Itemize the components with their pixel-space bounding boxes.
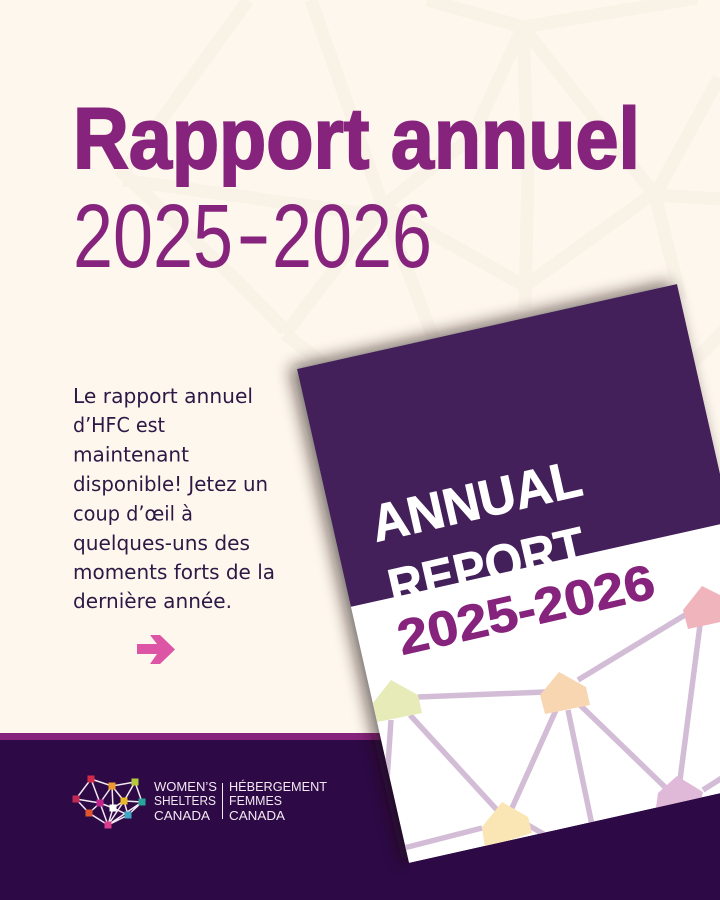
network node: orange: [540, 672, 590, 714]
title line: year: -: [236, 184, 271, 284]
logo wordmark: SHELTERS: [154, 793, 216, 808]
network lines: [387, 615, 720, 849]
book shadow: [290, 282, 720, 861]
intro text block: d’HFC est: [73, 413, 165, 437]
title: [73, 91, 640, 287]
title line: year: 2026: [272, 187, 432, 287]
intro text block: [73, 384, 275, 613]
title line: year: 2025: [73, 187, 233, 287]
cover purple panel: [297, 284, 720, 863]
report cover: [297, 284, 720, 863]
logo wordmark: CANADA: [154, 808, 210, 823]
title line: year: [73, 184, 432, 287]
intro text block: maintenant: [73, 442, 189, 466]
network node: pink: [683, 586, 720, 629]
intro text block: disponible! Jetez un: [73, 472, 268, 496]
cover title: REPORT: [383, 517, 591, 618]
logo wordmark: [154, 779, 327, 823]
logo wordmark: HÉBERGEMENT: [229, 779, 327, 794]
network node: green: [373, 680, 422, 722]
cover title: ANNUAL: [366, 450, 587, 554]
intro text block: coup d’œil à: [73, 502, 193, 526]
intro text block: Le rapport annuel: [73, 384, 253, 408]
logo wordmark: WOMEN’S: [154, 779, 217, 794]
footer band: [0, 733, 720, 900]
cover title: [376, 464, 584, 598]
title line: Rapport annuel: Rapport annuel: [73, 91, 640, 187]
footer cover strip: [409, 778, 720, 900]
logo network icon: [72, 776, 146, 828]
network node: yellow: [482, 802, 532, 848]
cover year: 2025-2026: [392, 555, 660, 666]
logo: [72, 776, 327, 828]
intro text block: quelques-uns des: [73, 531, 250, 555]
cover white panel: [350, 522, 720, 863]
intro text block: dernière année.: [73, 589, 232, 613]
logo wordmark: CANADA: [229, 808, 285, 823]
icon: arrow: [137, 635, 175, 664]
logo wordmark: FEMMES: [229, 793, 282, 808]
intro text block: moments forts de la: [73, 560, 275, 584]
network node: mauve: [656, 776, 703, 808]
